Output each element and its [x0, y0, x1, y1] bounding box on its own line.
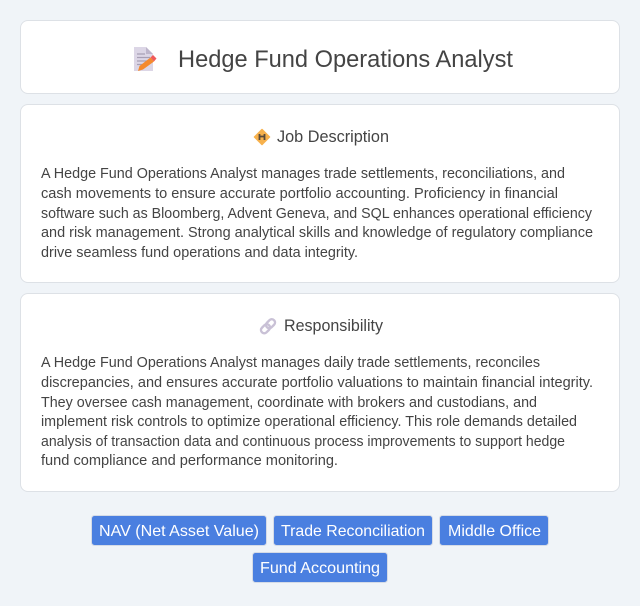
text: responsibility body: They oversee cash management, coordinate with brokers and custodians, and [41, 395, 537, 411]
text: job description body [41, 166, 593, 261]
tag: middle office: Middle Office [448, 523, 541, 540]
tag: NAV: NAV (Net Asset Value) [99, 523, 259, 540]
icon: document with pencil [134, 47, 156, 71]
text: responsibility body: implement risk controls to optimize operational efficiency. This role demands detailed [41, 414, 577, 430]
tag: fund accounting: Fund Accounting [260, 560, 380, 577]
tag: trade reconciliation [274, 516, 432, 546]
text: responsibility body: analysis of transaction data and continuous process improvements to support hedge [41, 434, 565, 450]
tags: keywords [92, 516, 548, 582]
text: responsibility body: A Hedge Fund Operations Analyst manages daily trade settlements, reconciles [41, 355, 540, 371]
text: responsibility body [41, 355, 593, 469]
tag: NAV [92, 516, 266, 546]
text: job description body: cash movements to ensure accurate portfolio accounting. Proficiency in financial [41, 186, 558, 202]
text: job description body: software such as Bloomberg, Advent Geneva, and SQL enhances operational efficiency [41, 206, 593, 222]
panel: responsibility [20, 294, 620, 492]
text: job description body: drive seamless fund operations and data integrity. [41, 245, 358, 261]
text: job description body: A Hedge Fund Operations Analyst manages trade settlements, reconciliations, and [41, 166, 565, 182]
heading: job description: Job Description [277, 128, 389, 146]
title: Hedge Fund Operations Analyst [178, 46, 513, 73]
text: responsibility body: fund compliance and performance monitoring. [41, 453, 338, 469]
text: job description body: and risk management. Strong analytical skills and knowledge of regulatory compliance [41, 225, 593, 241]
icon: chain link [260, 318, 276, 335]
text: responsibility body: discrepancies, and ensures accurate portfolio valuations to maintain financial integrity. [41, 375, 593, 391]
tag: trade reconciliation: Trade Reconciliation [281, 523, 425, 540]
tag: fund accounting [252, 552, 388, 582]
icon: road sign [254, 130, 270, 144]
panel: job description [20, 104, 620, 282]
tag: middle office [440, 516, 548, 546]
panel: title card [20, 20, 620, 94]
heading: responsibility: Responsibility [284, 317, 384, 335]
